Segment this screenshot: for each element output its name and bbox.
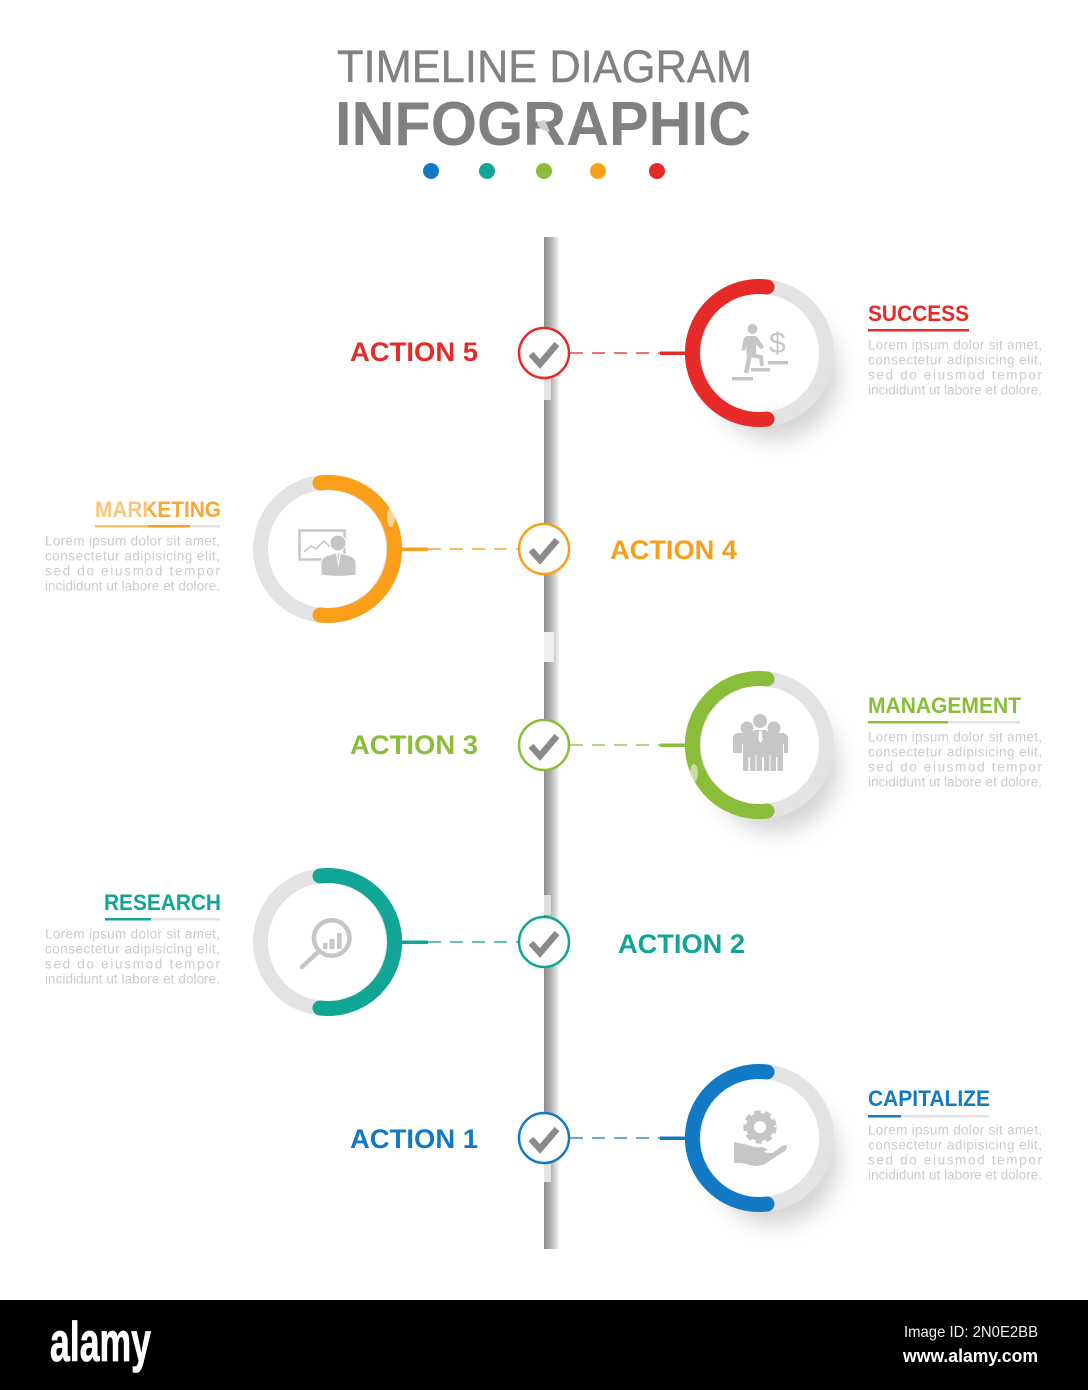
step 2: research [45,876,745,1008]
body text: consectetur adipisicing elit, [45,548,220,563]
ring shadow [711,1093,839,1225]
check badge [519,917,569,967]
footer bar [0,1300,1088,1390]
body text: incididunt ut labore et dolore. [45,578,220,593]
connector [400,940,518,944]
icon: presenter with chart board [300,530,356,576]
body text: consectetur adipisicing elit, [868,745,1042,760]
icon: person climbing steps with dollar: $ [769,327,786,360]
body text: sed do eiusmod tempor [45,563,220,578]
body text: sed do eiusmod tempor [45,956,220,971]
ring: marketing [260,482,395,616]
body text: incididunt ut labore et dolore. [868,1168,1042,1183]
body text [868,338,1042,398]
icon: business team [733,714,788,771]
body text: Lorem ipsum dolor sit amet, [868,730,1042,745]
check badge [519,720,569,770]
connector [570,1136,688,1140]
body text [868,730,1042,790]
connector [400,548,518,551]
connector [570,352,688,355]
colored dots row [423,163,665,179]
heading: SUCCESS [868,301,969,326]
step 5: success [350,286,1042,440]
title: TIMELINE DIAGRAM [337,41,752,92]
step 3: management [350,678,1042,832]
heading: CAPITALIZE [868,1086,990,1111]
ring: management [690,678,826,812]
ring: research [260,876,395,1008]
action label: ACTION 3 [350,730,478,760]
check badge [519,524,569,574]
connector [570,744,688,747]
action label: ACTION 2 [618,929,745,959]
body text: incididunt ut labore et dolore. [868,383,1042,398]
heading underline [868,329,969,332]
body text: consectetur adipisicing elit, [868,353,1042,368]
heading: MANAGEMENT [868,693,1022,718]
heading underline [105,918,220,920]
body text: consectetur adipisicing elit, [868,1138,1042,1153]
ring: capitalize [692,1072,826,1204]
icon: magnifier with bars [302,920,350,967]
body text: incididunt ut labore et dolore. [868,775,1042,790]
body text: incididunt ut labore et dolore. [45,971,220,986]
body text: consectetur adipisicing elit, [45,941,220,956]
heading: RESEARCH [104,890,221,915]
body text [868,1123,1042,1183]
icon: hand holding gear [734,1112,787,1166]
body text: sed do eiusmod tempor [868,1153,1042,1168]
title [335,41,752,159]
check badge [519,328,569,378]
action label: ACTION 4 [610,535,737,565]
ring shadow [711,700,839,832]
icon: person climbing steps with dollar [732,324,788,380]
body text: Lorem ipsum dolor sit amet, [868,1123,1042,1138]
title: INFOGRAPHIC [335,90,751,159]
heading underline [95,525,220,528]
body text: sed do eiusmod tempor [868,368,1042,383]
heading underline [868,721,1020,724]
body text [45,533,220,593]
body text: Lorem ipsum dolor sit amet, [868,338,1042,353]
footer logo: alamy [50,1310,151,1373]
body text: sed do eiusmod tempor [868,760,1042,775]
step 1: capitalize [350,1072,1042,1225]
image id: Image ID: 2N0E2BB [904,1324,1038,1341]
timeline spine [544,237,559,1249]
body text [45,926,220,986]
heading underline [868,1115,989,1118]
body text: Lorem ipsum dolor sit amet, [45,926,220,941]
check badge [519,1113,569,1163]
washed watermark patch [93,500,148,529]
heading: MARKETING [95,497,221,522]
action label: ACTION 5 [350,337,478,367]
site url: www.alamy.com [902,1346,1038,1366]
action label: ACTION 1 [350,1124,478,1154]
ring shadow [711,308,839,440]
ring: success [692,286,826,420]
step 4: marketing [45,482,737,616]
body text: Lorem ipsum dolor sit amet, [45,533,220,548]
